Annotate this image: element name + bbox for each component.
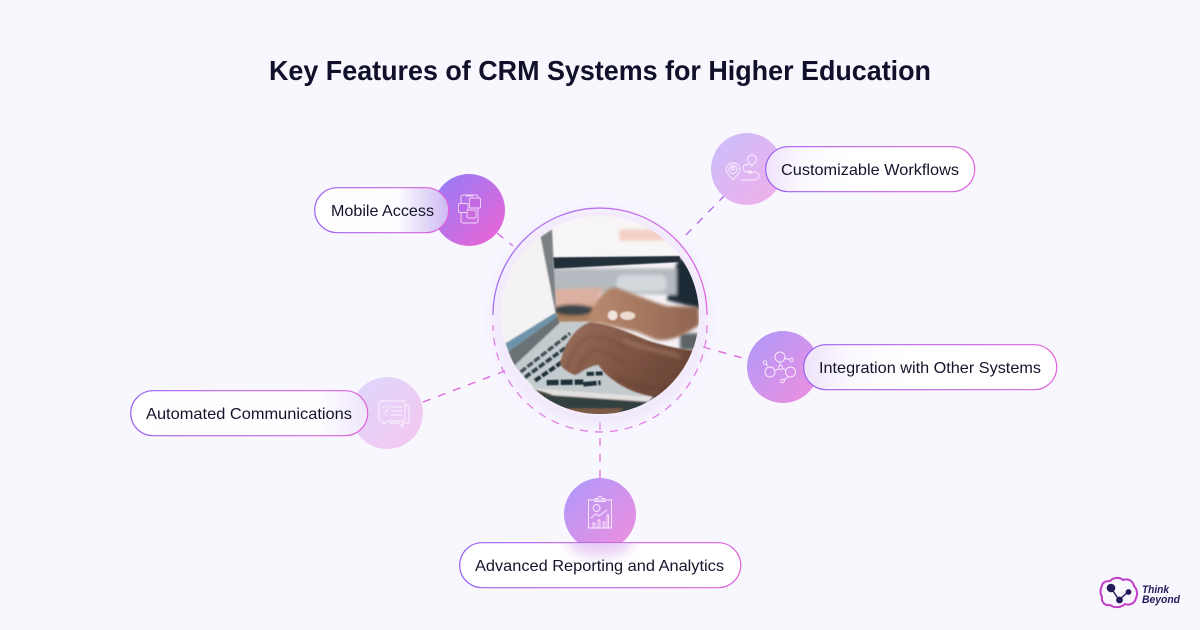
pill inner glow bbox=[564, 543, 636, 562]
icon circle bbox=[711, 133, 783, 205]
feature: Mobile Access bbox=[315, 174, 505, 246]
icon circle bbox=[564, 478, 636, 550]
label text: Automated Communications bbox=[146, 406, 352, 423]
label pill bbox=[460, 543, 741, 588]
back hand fingertips bbox=[608, 310, 618, 320]
title: Key Features of CRM Systems for Higher Education bbox=[269, 55, 931, 86]
monitor bottom bar bbox=[553, 256, 681, 269]
icon: phone with chat bubbles bbox=[458, 195, 480, 223]
back hand bbox=[588, 287, 699, 340]
label pill bbox=[766, 147, 975, 192]
connector lines bbox=[423, 195, 750, 478]
icon circle bbox=[351, 377, 423, 449]
icon: chat bubbles with question mark bbox=[379, 401, 409, 427]
ring: solid upper arc bbox=[493, 208, 707, 315]
label text: Mobile Access bbox=[331, 203, 434, 220]
label pill bbox=[131, 391, 368, 436]
ring: dashed lower arc bbox=[493, 325, 707, 432]
logo text line two: Beyond bbox=[1142, 594, 1180, 606]
logo text: Think bbox=[1142, 584, 1170, 596]
label text: Advanced Reporting and Analytics bbox=[475, 558, 724, 575]
photo: hands typing on a laptop bbox=[503, 216, 699, 414]
logo cloud mark bbox=[1100, 578, 1137, 607]
icon: clipboard with charts bbox=[588, 496, 612, 528]
laptop keys bbox=[521, 333, 603, 384]
label text: Integration with Other Systems bbox=[819, 360, 1041, 377]
label text: Customizable Workflows bbox=[781, 162, 959, 179]
central photo with ring bbox=[493, 208, 707, 432]
soft glow behind photo bbox=[494, 212, 706, 424]
logo network dots bbox=[1107, 584, 1131, 603]
front hand bbox=[560, 322, 693, 397]
feature: Advanced Reporting and Analytics bbox=[460, 478, 741, 588]
label pill bbox=[804, 345, 1057, 390]
icon: route with map pins bbox=[726, 155, 759, 180]
inner ring band bbox=[497, 212, 703, 418]
icon circle bbox=[433, 174, 505, 246]
feature: Integration with Other Systems bbox=[747, 331, 1057, 403]
icon circle bbox=[747, 331, 819, 403]
icon: connected network nodes bbox=[763, 352, 796, 383]
feature: Automated Communications bbox=[131, 377, 423, 449]
label pill bbox=[315, 188, 449, 233]
logo: Think Beyond bbox=[1100, 578, 1180, 607]
feature: Customizable Workflows bbox=[711, 133, 975, 205]
